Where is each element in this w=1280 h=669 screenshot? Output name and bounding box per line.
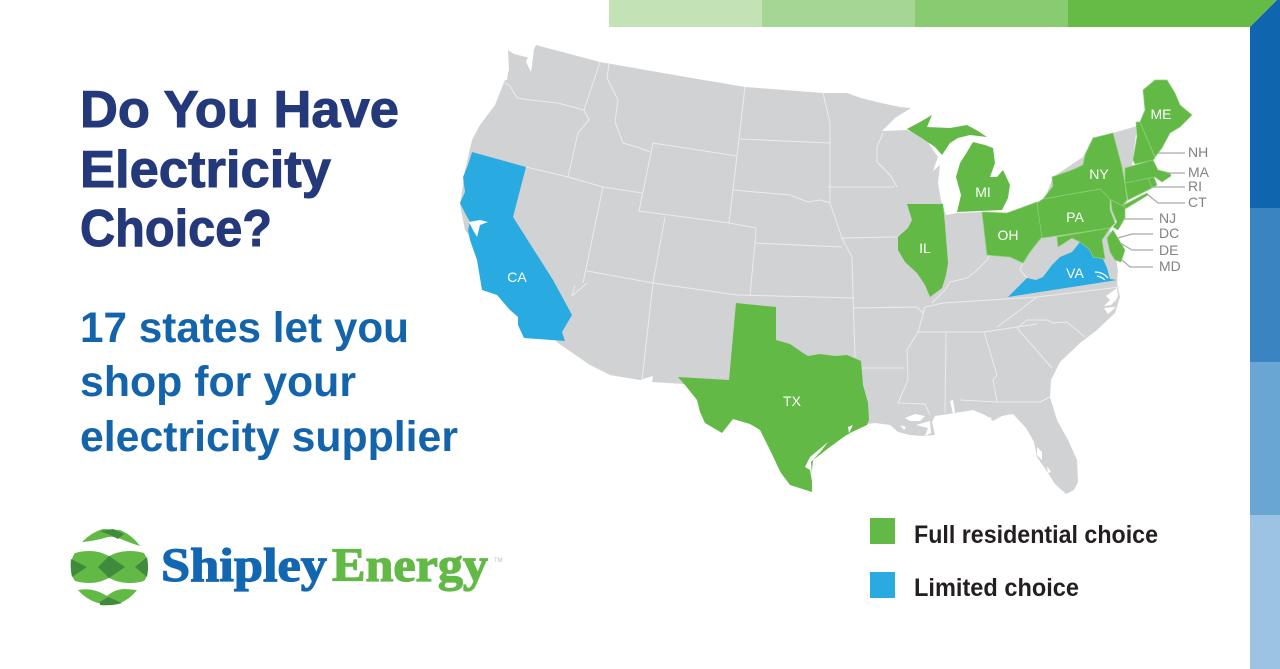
legend: limited choice: Limited choice xyxy=(914,574,1079,602)
small state callout labels: DE xyxy=(1159,242,1178,258)
state labels: CA xyxy=(507,269,527,285)
state labels: NY xyxy=(1089,166,1109,182)
state: Pennsylvania, full choice xyxy=(1037,189,1115,238)
logo: Shipley Energy xyxy=(71,529,503,605)
leader lines xyxy=(1118,153,1185,267)
legend: full residential choice: Full residential choice xyxy=(914,521,1158,549)
state: Maryland and Delaware, full choice xyxy=(1057,228,1125,262)
state labels: OH xyxy=(998,227,1018,243)
state labels xyxy=(507,106,1172,409)
logo: Shipley Energy: TM xyxy=(494,558,503,564)
state labels: ME xyxy=(1150,106,1172,122)
state labels: MI xyxy=(975,184,991,200)
state: Maine, full choice xyxy=(1140,80,1192,157)
state: Illinois, full choice xyxy=(898,204,948,297)
state: Connecticut, full choice xyxy=(1125,177,1152,200)
map of the United States xyxy=(460,45,1210,494)
small state callout labels: RI xyxy=(1188,178,1202,194)
icon: woven globe xyxy=(71,529,148,605)
state: Ohio, full choice xyxy=(982,202,1042,263)
small state callout labels: CT xyxy=(1188,194,1207,210)
right colour bar xyxy=(1250,0,1280,669)
subtitle xyxy=(80,304,458,461)
legend xyxy=(870,518,1158,602)
state: Texas, full choice xyxy=(678,303,869,492)
small state callout labels: NJ xyxy=(1159,210,1176,226)
state: Virginia, limited choice xyxy=(1008,242,1117,297)
state: Michigan upper peninsula, full choice xyxy=(907,115,987,155)
subtitle: electricity supplier xyxy=(80,413,458,461)
state labels: VA xyxy=(1066,265,1084,281)
small state callout labels: NH xyxy=(1188,144,1208,160)
state: New Hampshire, full choice xyxy=(1133,122,1155,164)
state: New Jersey, full choice xyxy=(1111,200,1125,230)
title: Choice? xyxy=(80,200,272,258)
logo: Shipley Energy: Energy xyxy=(332,539,488,592)
small state callout labels xyxy=(1159,144,1210,274)
subtitle: shop for your xyxy=(80,358,356,406)
state: New York, full choice xyxy=(1043,133,1148,209)
title: Electricity xyxy=(80,141,331,199)
small state callout labels: MA xyxy=(1188,164,1210,180)
state: Michigan lower peninsula, full choice xyxy=(956,142,1010,212)
title: Do You Have xyxy=(80,81,399,139)
state: California, limited choice xyxy=(460,152,572,341)
top colour bar xyxy=(609,0,1277,27)
title xyxy=(80,81,399,258)
grey base states xyxy=(460,45,1137,494)
water details xyxy=(503,48,1118,473)
state labels: PA xyxy=(1066,209,1084,225)
state labels: IL xyxy=(919,240,931,256)
state: Massachusetts, full choice xyxy=(1125,160,1171,183)
logo: Shipley Energy: Shipley xyxy=(161,539,327,592)
state: Rhode Island, full choice xyxy=(1148,175,1157,188)
state labels: TX xyxy=(783,393,802,409)
state borders xyxy=(503,62,1120,415)
subtitle: 17 states let you xyxy=(80,304,409,352)
small state callout labels: MD xyxy=(1159,258,1181,274)
small state callout labels: DC xyxy=(1159,225,1179,241)
